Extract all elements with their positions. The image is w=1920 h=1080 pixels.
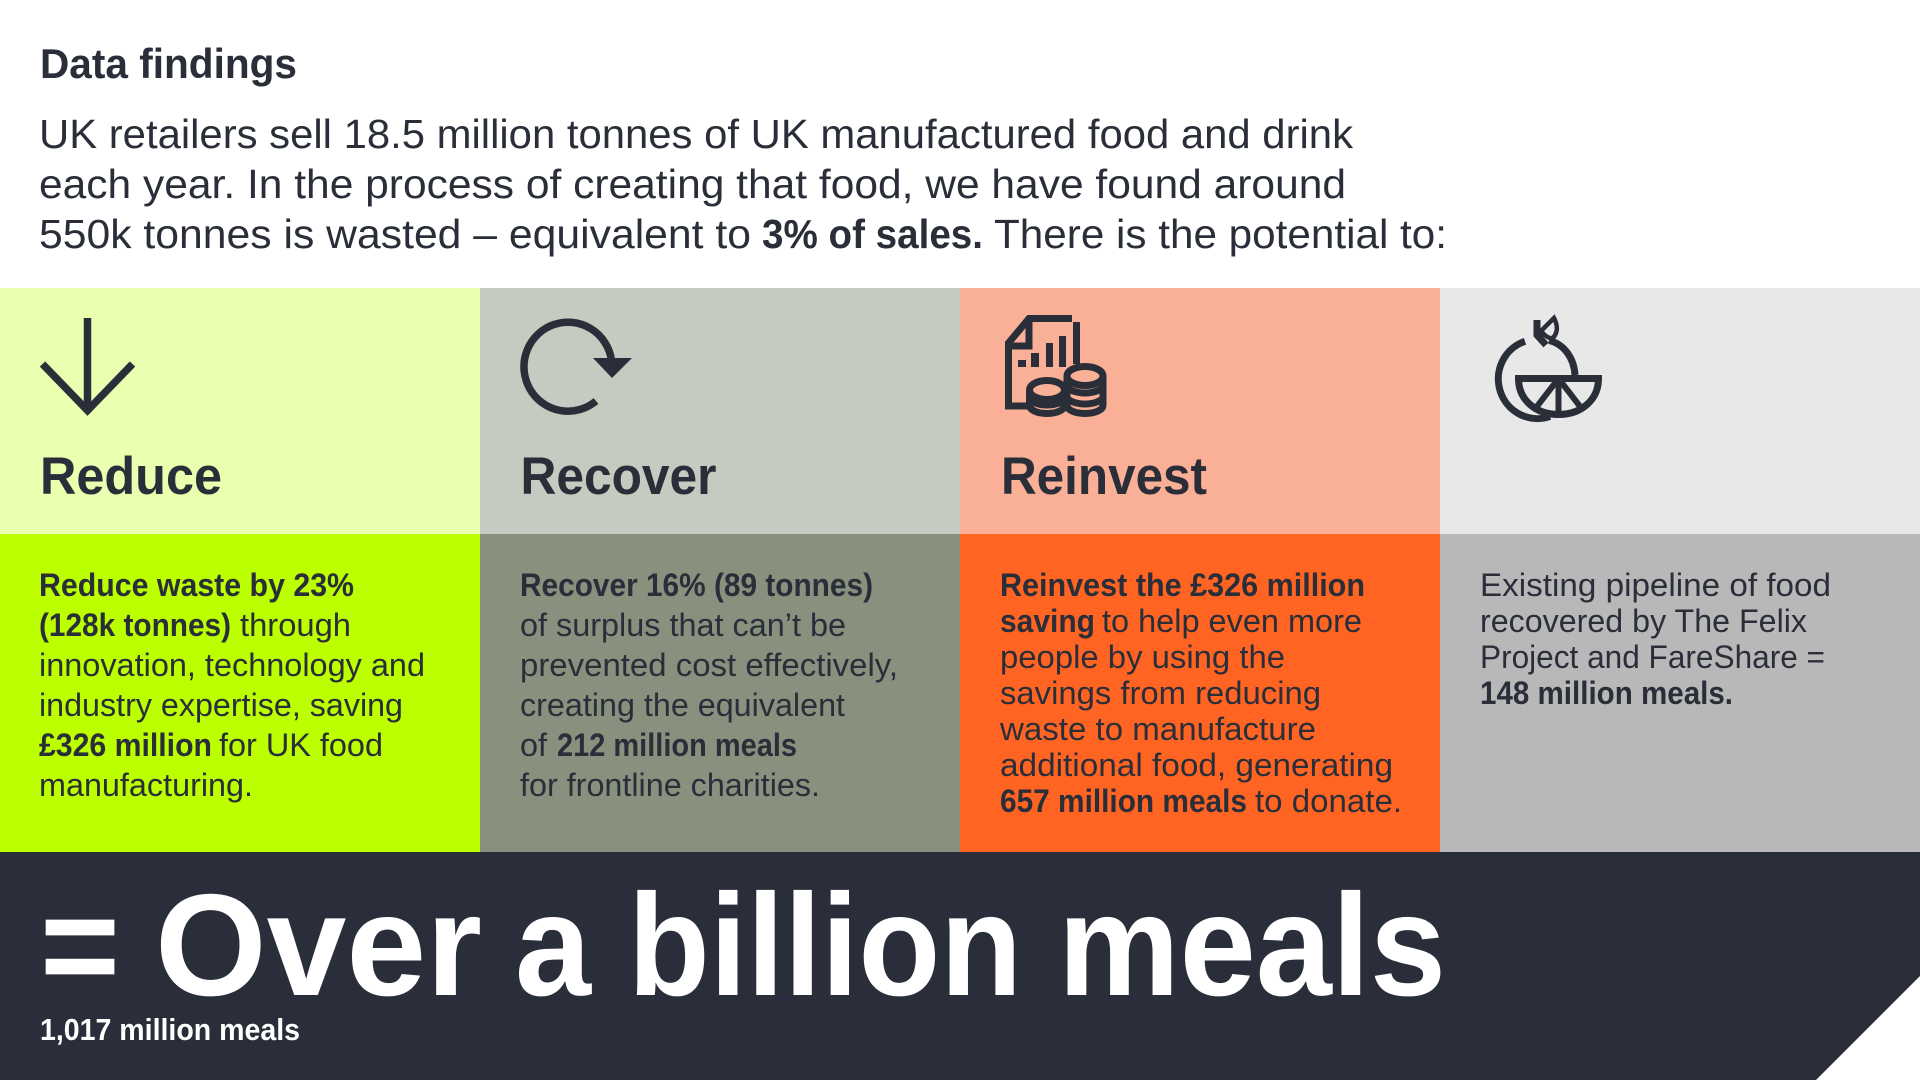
text: reinvest body: 657 million meals — [1000, 783, 1247, 819]
panel: recover — [480, 288, 960, 852]
text: reduce body: industry expertise, saving — [39, 687, 403, 723]
headline: over a billion meals — [40, 864, 1446, 1026]
heading: Reinvest: Reinvest — [1001, 447, 1207, 506]
panel: existing pipeline — [1440, 288, 1920, 852]
text: recover body: Recover 16% (89 tonnes) — [520, 567, 873, 603]
text: recover body: prevented cost effectively, — [520, 647, 898, 683]
headline: over a billion meals: = — [40, 864, 120, 1026]
heading: Recover: Recover — [520, 447, 716, 506]
text: total meals: 1,017 million meals — [40, 1012, 300, 1047]
text: recover body: for frontline charities. — [520, 767, 820, 803]
text: recover body: 212 million meals — [557, 727, 797, 763]
headline: over a billion meals: billion — [628, 864, 1022, 1026]
title: Data findings — [40, 40, 297, 87]
text: reinvest body: savings from reducing — [1000, 675, 1321, 711]
icon: down arrow — [42, 318, 132, 410]
headline: over a billion meals: Over — [155, 864, 482, 1026]
text: pipeline body: 148 million meals. — [1480, 675, 1733, 711]
heading: Reduce: Reduce — [40, 447, 222, 506]
text: reduce body: (128k tonnes) — [39, 607, 231, 643]
text: reinvest body: waste to manufacture — [999, 711, 1316, 747]
text: reduce body: manufacturing. — [39, 767, 253, 803]
text: reduce body: £326 million — [39, 727, 212, 763]
headline: over a billion meals: meals — [1058, 864, 1446, 1026]
headline: over a billion meals: a — [515, 864, 592, 1026]
intro text: each year. In the process of creating that food, we have found around — [39, 161, 1346, 207]
text: reduce body: innovation, technology and — [39, 647, 425, 683]
text: reinvest body: to donate. — [1255, 783, 1402, 819]
text: reduce body: Reduce waste by 23% — [39, 567, 354, 603]
intro text: UK retailers sell 18.5 million tonnes of UK manufactured food and drink — [39, 111, 1354, 157]
text: pipeline body: Existing pipeline of food — [1480, 567, 1831, 603]
intro text: 3% of sales. — [762, 211, 983, 257]
text: reinvest body: people by using the — [1000, 639, 1285, 675]
panel: reinvest — [960, 288, 1440, 852]
text: reinvest body: Reinvest the £326 million — [1000, 567, 1365, 603]
text: reinvest body: saving — [1000, 603, 1095, 639]
text: pipeline body — [1480, 567, 1831, 711]
text: pipeline body: Project and FareShare = — [1480, 639, 1825, 675]
text: reduce body — [39, 567, 425, 803]
text: reduce body: through — [240, 607, 351, 643]
text: recover body — [520, 567, 898, 803]
text: recover body: of surplus that can’t be — [520, 607, 846, 643]
panel: reduce — [0, 288, 480, 852]
text: recover body: creating the equivalent — [520, 687, 845, 723]
intro text: There is the potential to: — [994, 211, 1447, 257]
panel: total banner — [0, 852, 1920, 1080]
icon: fruit with slice — [1498, 318, 1598, 419]
intro text: 550k tonnes is wasted – equivalent to — [39, 211, 751, 257]
text: reinvest body: to help even more — [1102, 603, 1362, 639]
icon: document and coins — [1008, 318, 1103, 414]
text: reinvest body: additional food, generating — [1000, 747, 1393, 783]
intro text — [39, 111, 1447, 257]
text: recover body: of — [520, 727, 547, 763]
text: pipeline body: recovered by The Felix — [1480, 603, 1807, 639]
icon: recover loop arrow — [524, 322, 632, 411]
text: reinvest body — [999, 567, 1402, 819]
text: reduce body: for UK food — [219, 727, 383, 763]
